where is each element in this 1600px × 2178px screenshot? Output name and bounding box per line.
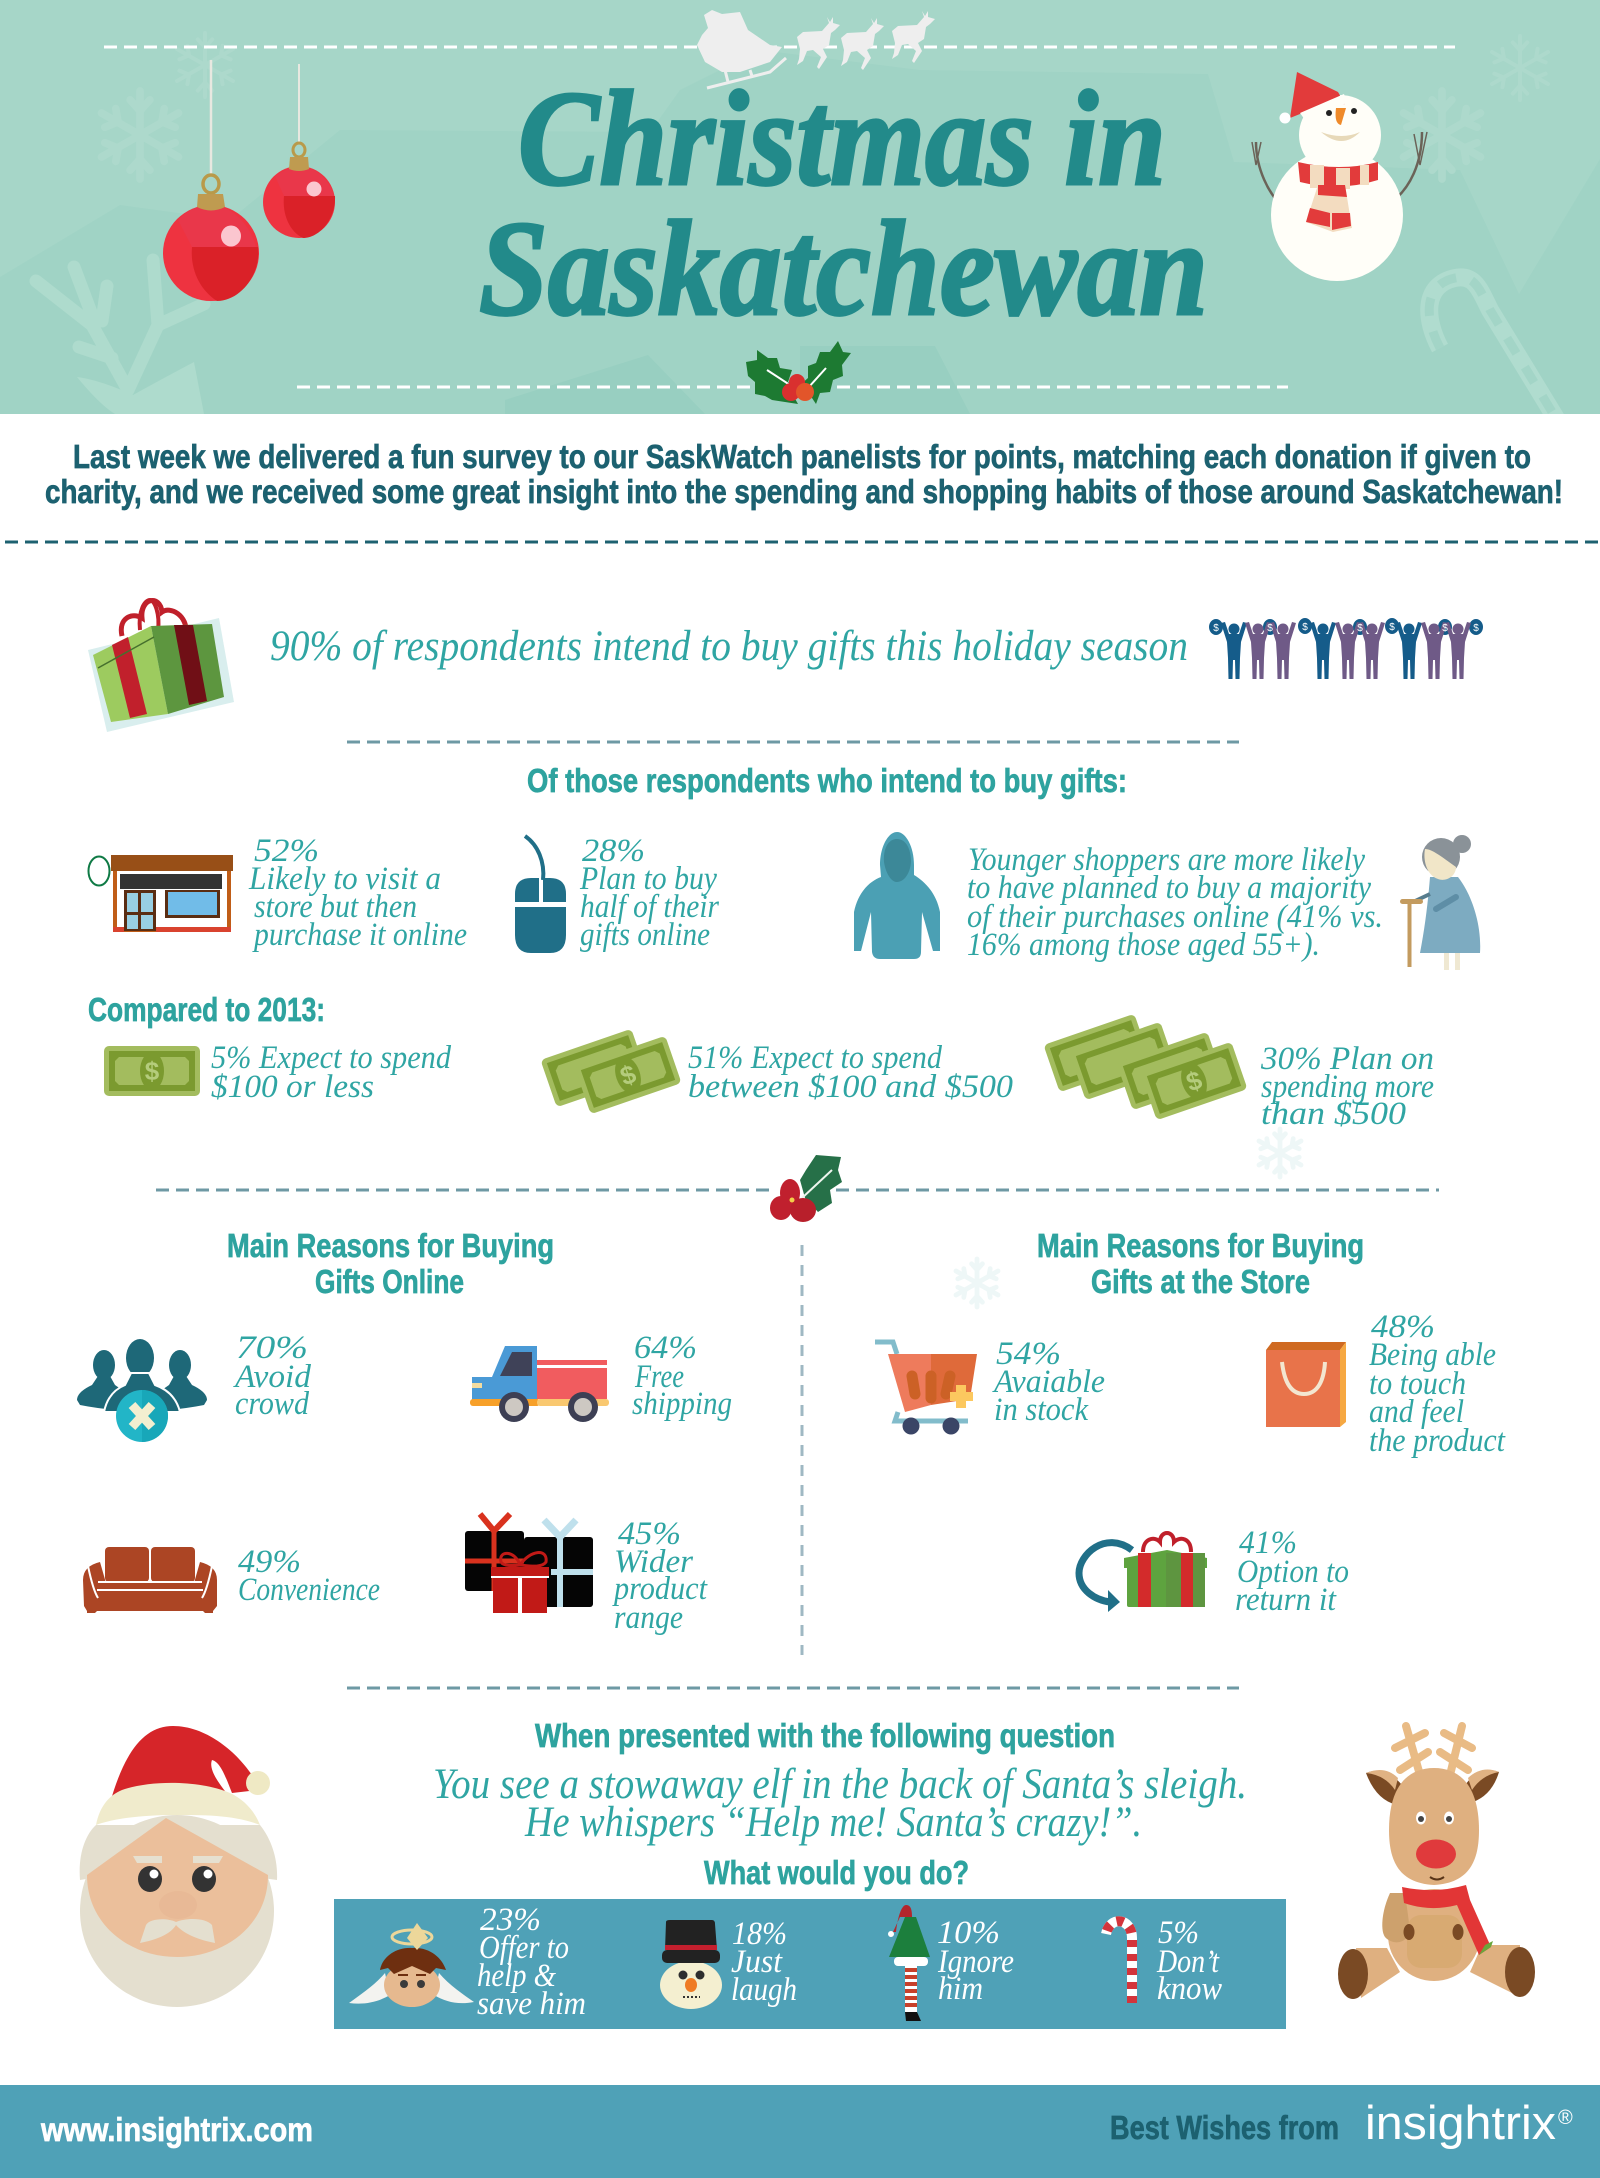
text: 90 percent: 90% of respondents intend to buy gifts this holiday season bbox=[270, 623, 1188, 670]
logo: insightrix: insightrix bbox=[1365, 2096, 1556, 2149]
text: 52 percent: Likely to visit a bbox=[248, 861, 441, 897]
heading: reasons store: Gifts at the Store bbox=[1091, 1263, 1310, 1300]
icon: old woman with cane bbox=[1400, 835, 1480, 970]
icon: four bills: $ bbox=[1182, 1064, 1206, 1098]
text: 5 percent: 5% Expect to spend bbox=[211, 1040, 451, 1076]
text: website: www.insightrix.com bbox=[40, 2111, 313, 2148]
text: 30 percent: 30% Plan on bbox=[1260, 1041, 1434, 1077]
panel: footer bbox=[0, 2085, 1600, 2178]
icon: candy cane bbox=[1106, 1921, 1132, 2003]
text: 5 percent bbox=[211, 1040, 451, 1105]
heading: reasons online: Main Reasons for Buying bbox=[227, 1227, 554, 1264]
text: younger shoppers: 16% among those aged 55+). bbox=[967, 927, 1320, 963]
text: 10 percent: him bbox=[938, 1971, 983, 2007]
text: 64 percent: 64% bbox=[634, 1330, 697, 1366]
icon: people with money bags: $ bbox=[1473, 623, 1479, 634]
text: 23 percent bbox=[477, 1902, 586, 2022]
text: younger shoppers: Younger shoppers are more likely bbox=[968, 842, 1365, 878]
icon: delivery truck bbox=[470, 1346, 609, 1422]
icon: shopping cart bbox=[875, 1342, 977, 1434]
panel: elf question bbox=[334, 1717, 1286, 2029]
text: 54 percent bbox=[992, 1336, 1105, 1428]
icon: small ornament bbox=[263, 64, 335, 238]
icon: people with money bags: $ bbox=[1442, 623, 1448, 634]
text: 41 percent: return it bbox=[1235, 1582, 1337, 1618]
intro text bbox=[45, 438, 1563, 510]
panel: spend 100 or less bbox=[104, 1040, 451, 1105]
text: 48 percent: Being able bbox=[1369, 1337, 1496, 1373]
text: 28 percent: Plan to buy bbox=[579, 861, 717, 897]
text: younger shoppers: of their purchases online (41% vs. bbox=[967, 899, 1383, 935]
text: 48 percent bbox=[1369, 1309, 1506, 1459]
icon: snowman bbox=[1252, 72, 1427, 281]
text: best wishes: Best Wishes from bbox=[1110, 2109, 1339, 2146]
panel: mouse stat bbox=[515, 833, 719, 953]
text: 51 percent: 51% Expect to spend bbox=[688, 1040, 942, 1076]
icon: hoodie bbox=[854, 832, 940, 959]
text: 41 percent: 41% bbox=[1239, 1525, 1297, 1561]
icon: return gift with arrow bbox=[1079, 1533, 1207, 1612]
icon: people with money bags: $ bbox=[1213, 623, 1219, 634]
icon: two bills bbox=[540, 1029, 682, 1114]
text: 10 percent: 10% bbox=[937, 1915, 1000, 1951]
text: 23 percent: 23% bbox=[480, 1902, 541, 1938]
icon: faint candy cane bbox=[1429, 277, 1560, 425]
text: 18 percent bbox=[731, 1916, 797, 2008]
text: 70 percent: 70% bbox=[236, 1330, 308, 1366]
heading: reasons online: Gifts Online bbox=[315, 1263, 464, 1300]
panel: spend over 500 bbox=[1043, 1014, 1434, 1132]
text: elf question bbox=[433, 1761, 1247, 1846]
text: 54 percent: 54% bbox=[996, 1336, 1061, 1372]
text: 10 percent: Ignore bbox=[937, 1944, 1014, 1980]
text: 70 percent bbox=[233, 1330, 312, 1422]
icon: single bill bbox=[104, 1046, 200, 1096]
text: 54 percent: Avaiable bbox=[992, 1364, 1105, 1400]
text: 28 percent: 28% bbox=[582, 833, 645, 869]
heading: when presented: When presented with the following question bbox=[535, 1717, 1115, 1754]
text: 70 percent: Avoid bbox=[233, 1359, 312, 1395]
text: 45 percent: range bbox=[614, 1600, 683, 1636]
text: 30 percent: spending more bbox=[1261, 1069, 1434, 1105]
text: 23 percent: help & bbox=[477, 1958, 556, 1994]
panel: 90 percent row bbox=[88, 600, 1483, 732]
text: elf question: He whispers “Help me! Santa’s crazy!”. bbox=[524, 1799, 1142, 1846]
icon: angel bbox=[349, 1923, 474, 2007]
text: 30 percent bbox=[1260, 1041, 1434, 1132]
panel: reasons online bbox=[77, 1227, 732, 1636]
heading: reasons online bbox=[227, 1227, 554, 1300]
text: 49 percent: 49% bbox=[238, 1544, 301, 1580]
heading: reasons store: Main Reasons for Buying bbox=[1037, 1227, 1364, 1264]
panel: spend 100 to 500 bbox=[540, 1029, 1014, 1114]
text: 52 percent: store but then bbox=[254, 889, 417, 925]
icon: people with money bags: $ bbox=[1357, 623, 1363, 634]
panel: header banner bbox=[0, 0, 1600, 425]
text: 70 percent: crowd bbox=[235, 1386, 309, 1422]
icon: elf girl bbox=[888, 1905, 930, 2021]
text: 45 percent: Wider bbox=[614, 1544, 693, 1580]
text: 28 percent: gifts online bbox=[580, 917, 710, 953]
icon: computer mouse bbox=[515, 836, 566, 953]
text: 48 percent: and feel bbox=[1369, 1394, 1464, 1430]
icon: single bill: $ bbox=[145, 1056, 160, 1086]
text: 5 percent answer: know bbox=[1157, 1971, 1222, 2007]
text: 48 percent: the product bbox=[1369, 1423, 1506, 1459]
text: younger shoppers bbox=[967, 842, 1383, 963]
text: 41 percent bbox=[1235, 1525, 1349, 1618]
text: 64 percent: shipping bbox=[632, 1386, 732, 1422]
icon: santa sleigh silhouette bbox=[697, 10, 935, 88]
text: 41 percent: Option to bbox=[1237, 1554, 1349, 1590]
text: 23 percent: save him bbox=[477, 1986, 586, 2022]
icon: santa face bbox=[80, 1726, 277, 2007]
icon: holly divider bbox=[770, 1155, 842, 1222]
icon: people with money bags bbox=[1209, 618, 1483, 679]
icon: sofa bbox=[83, 1547, 217, 1613]
text: 18 percent: Just bbox=[731, 1944, 783, 1980]
text: 23 percent: Offer to bbox=[479, 1930, 569, 1966]
text: 52 percent: purchase it online bbox=[252, 917, 467, 953]
text: 48 percent: to touch bbox=[1369, 1366, 1466, 1402]
text: 51 percent: between $100 and $500 bbox=[688, 1069, 1014, 1105]
title: Saskatchewan bbox=[479, 194, 1208, 344]
heading: of those respondents: Of those respondents who intend to buy gifts: bbox=[527, 762, 1127, 799]
icon: faint snowflakes bbox=[102, 33, 1548, 179]
icon: two bills: $ bbox=[616, 1058, 640, 1092]
text: 18 percent: 18% bbox=[732, 1916, 787, 1952]
text: 64 percent: Free bbox=[634, 1359, 684, 1395]
icon: very faint snowflakes bbox=[956, 1129, 1301, 1307]
text: 5 percent answer: 5% bbox=[1158, 1915, 1199, 1951]
icon: reindeer bbox=[1338, 1726, 1535, 1999]
text: 45 percent bbox=[612, 1516, 708, 1636]
panel: younger shoppers stat bbox=[854, 832, 1480, 970]
heading: compared to 2013: Compared to 2013: bbox=[88, 991, 325, 1028]
icon: people with money bags: $ bbox=[1267, 623, 1273, 634]
icon: people with money bags: $ bbox=[1389, 622, 1395, 633]
icon: shopping bag bbox=[1266, 1342, 1346, 1427]
text: 45 percent: product bbox=[612, 1571, 708, 1607]
text: 5 percent answer: Don’t bbox=[1156, 1944, 1220, 1980]
icon: people with money bags: $ bbox=[1302, 622, 1308, 633]
text: 18 percent: laugh bbox=[731, 1972, 797, 2008]
icon: four bills bbox=[1043, 1014, 1248, 1120]
icon: large ornament bbox=[163, 60, 259, 301]
text: younger shoppers: to have planned to buy a majority bbox=[967, 870, 1371, 906]
text: 52 percent: 52% bbox=[254, 833, 319, 869]
text: 49 percent: Convenience bbox=[238, 1572, 380, 1608]
panel: store stat bbox=[88, 833, 467, 953]
text: 49 percent bbox=[238, 1544, 380, 1608]
icon: holly with berries bbox=[746, 341, 851, 404]
icon: crowd with cross bbox=[77, 1339, 207, 1442]
icon: faint antlers bbox=[36, 260, 204, 414]
logo: insightrix: ® bbox=[1558, 2107, 1573, 2129]
text: 10 percent bbox=[937, 1915, 1014, 2007]
text: 51 percent bbox=[688, 1040, 1014, 1105]
text: 28 percent bbox=[579, 833, 719, 953]
text: 45 percent: 45% bbox=[618, 1516, 681, 1552]
icon: store bbox=[88, 855, 233, 932]
text: 5 percent answer bbox=[1156, 1915, 1222, 2007]
text: 52 percent bbox=[248, 833, 467, 953]
title bbox=[480, 88, 1204, 317]
title: Christmas in bbox=[518, 64, 1166, 214]
text: 5 percent: $100 or less bbox=[211, 1069, 374, 1105]
icon: green gift bbox=[88, 600, 234, 732]
text: 54 percent: in stock bbox=[994, 1392, 1089, 1428]
text: 28 percent: half of their bbox=[580, 889, 719, 925]
heading: what would you do: What would you do? bbox=[704, 1854, 969, 1891]
heading: reasons store bbox=[1037, 1227, 1364, 1300]
text: 64 percent bbox=[632, 1330, 732, 1422]
icon: stack of gifts bbox=[465, 1514, 593, 1613]
panel: answer bar bbox=[334, 1899, 1286, 2029]
panel: reasons at the store bbox=[875, 1227, 1506, 1618]
text: elf question: You see a stowaway elf in the back of Santa’s sleigh. bbox=[433, 1761, 1247, 1808]
icon: snowman face with top hat bbox=[660, 1920, 722, 2009]
text: 48 percent: 48% bbox=[1371, 1309, 1435, 1345]
text: 30 percent: than $500 bbox=[1261, 1096, 1407, 1132]
